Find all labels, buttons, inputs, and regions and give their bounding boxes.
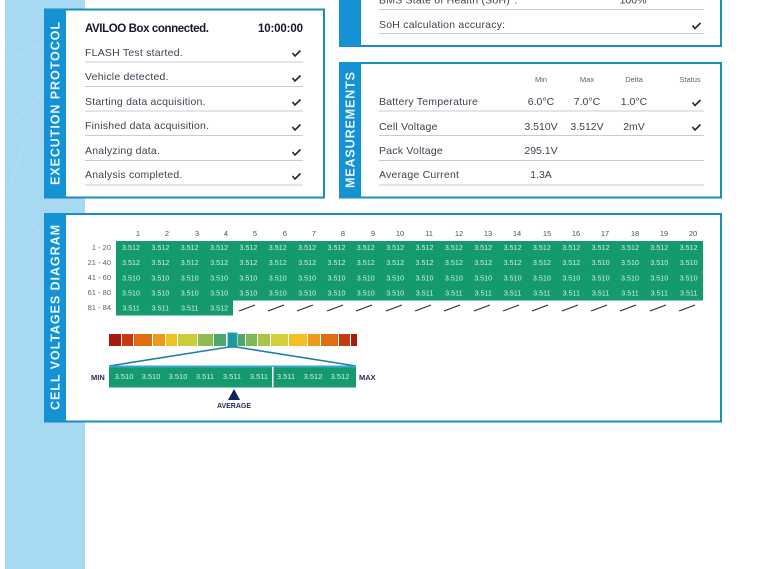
row: cell voltage bbox=[379, 121, 704, 136]
row: pack voltage: 295.1V bbox=[524, 145, 558, 157]
cells row 61-80: 3.510 bbox=[386, 288, 404, 298]
row: battery temperature: 7.0°C bbox=[574, 96, 601, 108]
cells row 41-60: 3.510 bbox=[621, 274, 639, 282]
row: battery temperature: 6.0°C bbox=[528, 96, 555, 108]
row: analysis completed bbox=[85, 169, 303, 185]
cells row 81-84: 3.512 bbox=[210, 304, 228, 312]
header row: connection and time bbox=[85, 23, 303, 35]
average distribution bar: 3.511 bbox=[223, 372, 241, 381]
cells row 1-20: 3.512 bbox=[445, 243, 463, 252]
column numbers: 12 bbox=[455, 229, 463, 238]
cells row 61-80: 3.510 bbox=[298, 288, 316, 298]
column numbers bbox=[136, 229, 697, 238]
cells row 41-60: 3.510 bbox=[298, 274, 316, 282]
cells row 21-40: 3.510 bbox=[650, 258, 668, 267]
average distribution bar: 3.510 bbox=[115, 372, 133, 381]
cells row 1-20: 3.512 bbox=[357, 243, 375, 252]
column numbers: 7 bbox=[312, 229, 316, 238]
empty cell dashes bbox=[239, 305, 695, 311]
cells row 1-20 bbox=[122, 243, 698, 252]
cells row 1-20: 3.512 bbox=[474, 243, 492, 252]
average distribution bar bbox=[109, 366, 356, 388]
row: cell voltage: Cell Voltage bbox=[379, 121, 438, 133]
label: max: MAX bbox=[359, 373, 376, 382]
cells row 21-40: 3.512 bbox=[474, 258, 492, 267]
cells row 61-80: 3.510 bbox=[239, 288, 257, 298]
row: battery temperature: Battery Temperature bbox=[379, 96, 478, 108]
cells row 41-60: 3.510 bbox=[562, 274, 580, 282]
cells row 21-40: 3.512 bbox=[328, 258, 346, 267]
row: soh calculation accuracy bbox=[379, 19, 704, 34]
cells row 1-20: 3.512 bbox=[151, 243, 169, 252]
cells row 21-40: 3.512 bbox=[298, 258, 316, 267]
row: soh calculation accuracy: SoH calculation accuracy: bbox=[379, 19, 505, 31]
cells row 61-80: 3.511 bbox=[533, 288, 551, 298]
cells row 61-80: 3.510 bbox=[151, 288, 169, 298]
column numbers: 20 bbox=[689, 229, 697, 238]
panel: execution protocol bbox=[44, 9, 324, 198]
cells row 1-20: 3.512 bbox=[181, 243, 199, 252]
row: finished data acquisition: Finished data acquisition. bbox=[85, 120, 209, 132]
cells row 61-80: 3.511 bbox=[651, 288, 668, 298]
cells row 21-40: 3.512 bbox=[210, 258, 228, 267]
cells row 1-20: 3.512 bbox=[533, 243, 551, 252]
cells row 41-60: 3.510 bbox=[680, 274, 698, 282]
cells row 21-40: 3.512 bbox=[504, 258, 522, 267]
row labels: 41 - 60 bbox=[88, 273, 111, 282]
row: average current: 1.3A bbox=[530, 169, 552, 181]
cells row 41-60: 3.510 bbox=[181, 274, 199, 282]
cells row 81-84: 3.511 bbox=[152, 304, 169, 312]
cells row 1-20: 3.512 bbox=[298, 243, 316, 252]
heading: execution protocol: EXECUTION PROTOCOL bbox=[48, 22, 62, 185]
cells row 41-60: 3.510 bbox=[269, 274, 287, 282]
panel: state of health bbox=[339, 0, 721, 47]
scale marker bbox=[228, 333, 237, 347]
average distribution bar: 3.512 bbox=[304, 372, 322, 381]
cells row 21-40: 3.512 bbox=[151, 258, 169, 267]
cells row 41-60: 3.510 bbox=[445, 274, 463, 282]
column numbers: 5 bbox=[253, 229, 257, 238]
row: battery temperature bbox=[379, 96, 704, 111]
cells row 21-40: 3.512 bbox=[562, 258, 580, 267]
row: average current bbox=[379, 169, 704, 185]
row: analysis completed: Analysis completed. bbox=[85, 169, 183, 181]
cells row 21-40: 3.512 bbox=[386, 258, 404, 267]
row labels: 21 - 40 bbox=[88, 258, 111, 267]
cells row 1-20: 3.512 bbox=[328, 243, 346, 252]
row: bms state of health bbox=[379, 0, 704, 10]
cells row 81-84: 3.511 bbox=[181, 304, 198, 312]
cells row 1-20: 3.512 bbox=[210, 243, 228, 252]
label: min: MIN bbox=[91, 373, 105, 382]
row: flash test started bbox=[85, 47, 303, 62]
colour scale bar bbox=[109, 334, 357, 346]
cells row 21-40: 3.512 bbox=[239, 258, 257, 267]
cells row 21-40: 3.510 bbox=[592, 258, 610, 267]
cells row 41-60: 3.510 bbox=[474, 274, 492, 282]
voltage grid bbox=[116, 241, 703, 316]
table header: Min bbox=[535, 75, 547, 84]
column numbers: 13 bbox=[484, 229, 492, 238]
average distribution bar: 3.511 bbox=[196, 372, 214, 381]
cells row 61-80: 3.511 bbox=[563, 288, 580, 298]
cells row 21-40 bbox=[122, 258, 698, 267]
column numbers: 11 bbox=[425, 229, 433, 238]
column numbers: 4 bbox=[224, 229, 228, 238]
heading: cell voltages diagram: CELL VOLTAGES DIAGRAM bbox=[48, 225, 62, 410]
cells row 61-80: 3.511 bbox=[504, 288, 521, 298]
row: starting data acquisition bbox=[85, 96, 303, 111]
cells row 41-60: 3.510 bbox=[592, 274, 610, 282]
cells row 61-80: 3.510 bbox=[269, 288, 287, 298]
cells row 21-40: 3.512 bbox=[416, 258, 434, 267]
heading: measurements: MEASUREMENTS bbox=[344, 72, 358, 188]
row: battery temperature: 1.0°C bbox=[621, 96, 648, 108]
cells row 21-40: 3.512 bbox=[533, 258, 551, 267]
column numbers: 8 bbox=[341, 229, 345, 238]
column numbers: 14 bbox=[513, 229, 521, 238]
average marker bbox=[228, 389, 240, 400]
cells row 41-60: 3.510 bbox=[328, 274, 346, 282]
label: average: AVERAGE bbox=[217, 403, 251, 410]
header row: connection and time: AVILOO Box connected. bbox=[85, 23, 209, 35]
row labels: 81 - 84 bbox=[88, 303, 111, 312]
average distribution bar: 3.510 bbox=[169, 372, 187, 381]
table header: Delta bbox=[625, 75, 644, 84]
average distribution bar: 3.510 bbox=[142, 372, 160, 381]
cells row 61-80 bbox=[122, 288, 697, 298]
cells row 41-60: 3.510 bbox=[151, 274, 169, 282]
row: analyzing data bbox=[85, 145, 303, 160]
cells row 1-20: 3.512 bbox=[239, 243, 257, 252]
row: pack voltage bbox=[379, 145, 704, 160]
row: average current: Average Current bbox=[379, 169, 459, 181]
cells row 21-40: 3.512 bbox=[269, 258, 287, 267]
cells row 1-20: 3.512 bbox=[562, 243, 580, 252]
column numbers: 9 bbox=[371, 229, 375, 238]
row labels: 1 - 20 bbox=[92, 243, 111, 252]
cells row 61-80: 3.511 bbox=[416, 288, 433, 298]
cells row 21-40: 3.512 bbox=[445, 258, 463, 267]
cells row 1-20: 3.512 bbox=[650, 243, 668, 252]
row: finished data acquisition bbox=[85, 120, 303, 136]
column numbers: 6 bbox=[283, 229, 287, 238]
cells row 41-60: 3.510 bbox=[416, 274, 434, 282]
cells row 61-80: 3.510 bbox=[328, 288, 346, 298]
cells row 21-40: 3.510 bbox=[621, 258, 639, 267]
cells row 81-84 bbox=[122, 304, 228, 312]
column numbers: 17 bbox=[601, 229, 609, 238]
row: cell voltage: 3.510V bbox=[524, 121, 558, 133]
cells row 1-20: 3.512 bbox=[269, 243, 287, 252]
table header bbox=[535, 75, 701, 84]
cells row 61-80: 3.511 bbox=[592, 288, 609, 298]
column numbers: 19 bbox=[660, 229, 668, 238]
column numbers: 15 bbox=[543, 229, 551, 238]
cells row 1-20: 3.512 bbox=[386, 243, 404, 252]
cells row 41-60: 3.510 bbox=[239, 274, 257, 282]
cells row 61-80: 3.511 bbox=[621, 288, 639, 298]
column numbers: 16 bbox=[572, 229, 580, 238]
cells row 41-60: 3.510 bbox=[386, 274, 404, 282]
zoom lines bbox=[109, 347, 356, 366]
column numbers: 2 bbox=[165, 229, 169, 238]
cells row 41-60 bbox=[122, 274, 698, 282]
cells row 41-60: 3.510 bbox=[122, 274, 140, 282]
average distribution bar: 3.511 bbox=[277, 372, 295, 381]
cells row 1-20: 3.512 bbox=[122, 243, 140, 252]
panel: measurements bbox=[339, 62, 721, 198]
column numbers: 18 bbox=[631, 229, 639, 238]
cells row 61-80: 3.510 bbox=[357, 288, 375, 298]
row: analyzing data: Analyzing data. bbox=[85, 145, 160, 157]
column numbers: 10 bbox=[396, 229, 404, 238]
cells row 41-60: 3.510 bbox=[504, 274, 522, 282]
row: vehicle detected: Vehicle detected. bbox=[85, 71, 169, 83]
cells row 21-40: 3.512 bbox=[122, 258, 140, 267]
panel: cell voltages diagram bbox=[44, 213, 721, 422]
row: pack voltage: Pack Voltage bbox=[379, 145, 443, 157]
cells row 1-20: 3.512 bbox=[416, 243, 434, 252]
cells row 41-60: 3.510 bbox=[210, 274, 228, 282]
table header: Status bbox=[679, 75, 701, 84]
row labels bbox=[88, 243, 111, 312]
cells row 21-40: 3.510 bbox=[680, 258, 698, 267]
header row: connection and time: 10:00:00 bbox=[258, 23, 303, 35]
cells row 61-80: 3.511 bbox=[680, 288, 697, 298]
cells row 61-80: 3.510 bbox=[210, 288, 228, 298]
row: starting data acquisition: Starting data acquisition. bbox=[85, 96, 206, 108]
background band bbox=[5, 0, 85, 569]
cells row 41-60: 3.510 bbox=[357, 274, 375, 282]
cells row 1-20: 3.512 bbox=[621, 243, 639, 252]
cells row 1-20: 3.512 bbox=[592, 243, 610, 252]
row labels: 61 - 80 bbox=[88, 288, 111, 297]
table header: Max bbox=[580, 75, 594, 84]
average distribution bar: 3.512 bbox=[331, 372, 349, 381]
row: cell voltage: 2mV bbox=[623, 121, 645, 133]
cells row 1-20: 3.512 bbox=[504, 243, 522, 252]
cells row 41-60: 3.510 bbox=[650, 274, 668, 282]
cells row 61-80: 3.510 bbox=[181, 288, 199, 298]
cells row 81-84: 3.511 bbox=[122, 304, 140, 312]
average distribution bar: 3.511 bbox=[250, 372, 268, 381]
cells row 1-20: 3.512 bbox=[680, 243, 698, 252]
cells row 61-80: 3.511 bbox=[445, 288, 463, 298]
cells row 41-60: 3.510 bbox=[533, 274, 551, 282]
cells row 61-80: 3.511 bbox=[474, 288, 492, 298]
column numbers: 1 bbox=[136, 229, 140, 238]
row: vehicle detected bbox=[85, 71, 303, 86]
row: cell voltage: 3.512V bbox=[570, 121, 604, 133]
cells row 61-80: 3.510 bbox=[122, 288, 140, 298]
column numbers: 3 bbox=[195, 229, 199, 238]
cells row 21-40: 3.512 bbox=[357, 258, 375, 267]
cells row 21-40: 3.512 bbox=[181, 258, 199, 267]
row: flash test started: FLASH Test started. bbox=[85, 47, 183, 59]
